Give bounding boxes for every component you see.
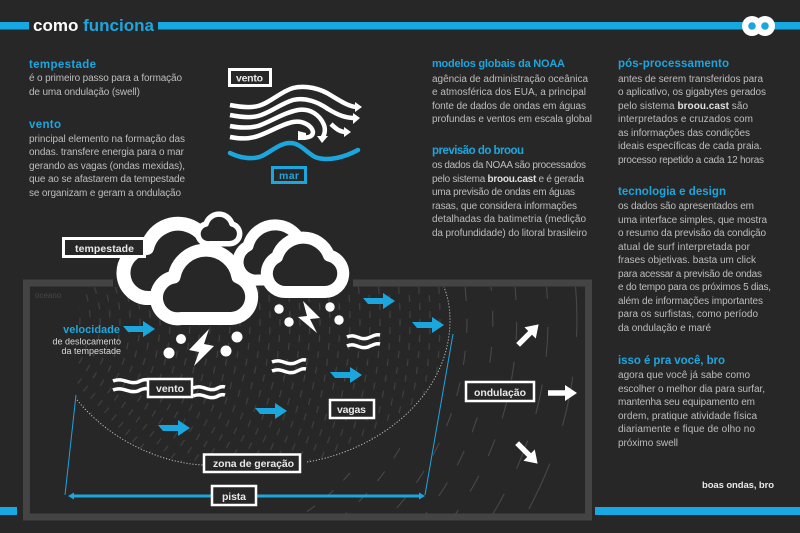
text: modelos globais and previsão do broou: fonte de dados de ondas em águas [432, 101, 586, 112]
text: pós-processamento, tecnologia e design, isso é pra você: além de informações importantes [618, 296, 763, 307]
text: pós-processamento, tecnologia e design, isso é pra você: atual de surf interpretada por [618, 242, 751, 253]
label: pista [212, 486, 256, 505]
label: vagas: vagas [337, 404, 366, 416]
label: tempestade [64, 238, 144, 256]
text: modelos globais and previsão do broou: uma previsão de ondas em águas [432, 187, 575, 198]
text: modelos globais and previsão do broou: previsão do broou [432, 145, 524, 157]
ocean label: oceano [35, 291, 62, 300]
white swell arrows [511, 319, 577, 469]
label: tempestade: tempestade [75, 243, 134, 255]
text: pós-processamento, tecnologia e design, isso é pra você: diariamente e fique de olho no [618, 424, 755, 435]
text: modelos globais and previsão do broou: detalhadas da batimetria (medição [432, 214, 586, 225]
text: tempestade and vento: que ao se afastarem da tempestade [29, 174, 185, 185]
wind wave symbols [113, 335, 380, 398]
text: tempestade and vento: principal elemento na formação das [29, 134, 185, 145]
storm clouds [123, 214, 343, 319]
label: zona de geração [204, 454, 300, 472]
text: pós-processamento, tecnologia e design, isso é pra você: antes de serem transferidos para [618, 74, 763, 85]
text: pós-processamento, tecnologia e design, isso é pra você [618, 58, 771, 449]
cloud: main front [156, 250, 252, 319]
label: velocidade de deslocamento da tempestade: velocidade [63, 324, 120, 336]
sign-off text: boas ondas, bro [702, 480, 774, 491]
text: pós-processamento, tecnologia e design, isso é pra você: isso é pra você, bro [618, 355, 725, 367]
text: modelos globais and previsão do broou [432, 58, 592, 239]
label: velocidade de deslocamento da tempestade: de deslocamento [52, 336, 121, 346]
footer bars [0, 507, 800, 515]
text: tempestade and vento: gerando as vagas (ondas mexidas), [29, 161, 185, 172]
pista arrow [68, 492, 425, 500]
text: pós-processamento, tecnologia e design, isso é pra você: o aplicativo, os gigabytes gerados [618, 87, 766, 98]
text: modelos globais and previsão do broou: e atmosférica dos EUA, a principal [432, 87, 586, 98]
text: pós-processamento, tecnologia e design, isso é pra você: agora que você já sabe como [618, 370, 750, 381]
text: modelos globais and previsão do broou: agência de administração oceânica [432, 74, 588, 85]
text: modelos globais and previsão do broou: pelo sistema broou.cast e é gerada [432, 174, 584, 185]
text: pós-processamento, tecnologia e design, isso é pra você: ideais específicas de cada praia. [618, 141, 762, 152]
text: pós-processamento, tecnologia e design, isso é pra você: uma interface simples, que mostra [618, 215, 767, 226]
text: tempestade and vento: ondas. transfere energia para o mar [29, 147, 185, 158]
text: modelos globais and previsão do broou: profundas e ventos em escala global [432, 114, 592, 125]
label: ondulação: ondulação [474, 387, 526, 399]
text: pós-processamento, tecnologia e design, isso é pra você: para acessar a previsão de ondas [618, 269, 762, 280]
text: pós-processamento, tecnologia e design, isso é pra você: os dados são apresentados em [618, 201, 754, 212]
label: vagas [330, 400, 374, 418]
cloud: front right [267, 238, 343, 292]
text: pós-processamento, tecnologia e design, isso é pra você: da ondulação e maré [618, 323, 711, 334]
label: vento: vento [236, 72, 263, 84]
text: pós-processamento, tecnologia e design, isso é pra você: o resumo da previsão da condição [618, 228, 766, 239]
wind lines [230, 87, 357, 138]
blue wind arrows [123, 293, 444, 436]
text: pós-processamento, tecnologia e design, isso é pra você: interpretados e cruzados com [618, 114, 753, 125]
header bar and title [0, 16, 800, 35]
text: modelos globais and previsão do broou: rasas, que considera informações [432, 201, 577, 212]
text: tempestade and vento [29, 59, 185, 199]
storm precipitation and lightning [164, 301, 344, 366]
diagram: wind and sea [230, 70, 362, 182]
text: pós-processamento, tecnologia e design, isso é pra você: pós-processamento [618, 58, 729, 70]
text: modelos globais and previsão do broou: os dados da NOAA são processados [432, 160, 586, 171]
text: pós-processamento, tecnologia e design, isso é pra você: para os surfistas, como período [618, 309, 758, 320]
label: zona de geração: zona de geração [213, 458, 294, 470]
panel: ocean frame [26, 283, 588, 517]
wind arrowheads [298, 102, 362, 143]
label: ondulação [466, 382, 534, 401]
text: tempestade and vento: se organizam e geram a ondulação [29, 188, 181, 199]
text: modelos globais and previsão do broou: da profundidade) do litoral brasileiro [432, 228, 587, 239]
cloud: back left [123, 224, 210, 298]
label: velocidade de deslocamento da tempestade [52, 324, 121, 356]
label: velocidade de deslocamento da tempestade: da tempestade [61, 346, 121, 356]
text: tempestade and vento: tempestade [29, 59, 96, 71]
label: vento [148, 379, 192, 397]
text: modelos globais and previsão do broou: modelos globais da NOAA [432, 58, 565, 70]
sea wave [230, 143, 358, 159]
text: pós-processamento, tecnologia e design, isso é pra você: mantenha seu equipamento em [618, 397, 755, 408]
text: tempestade and vento: é o primeiro passo para a formação [29, 73, 182, 84]
text: pós-processamento, tecnologia e design, isso é pra você: tecnologia e design [618, 186, 726, 198]
icon: logo [742, 16, 775, 36]
label: vento: vento [156, 383, 184, 395]
label: pista: pista [222, 491, 246, 503]
text: pós-processamento, tecnologia e design, isso é pra você: as informações das condições [618, 128, 750, 139]
generation zone dotted boundary [77, 287, 450, 465]
text: tempestade and vento: de uma ondulação (swell) [29, 87, 140, 98]
generation zone wave hatching [77, 287, 450, 462]
text: pós-processamento, tecnologia e design, isso é pra você: frases objetivas. basta um click [618, 255, 757, 266]
fetch guide lines [65, 334, 453, 495]
cloud: back right [238, 225, 303, 280]
title: como funciona [33, 16, 155, 35]
text: pós-processamento, tecnologia e design, isso é pra você: processo repetido a cada 12 horas [618, 155, 764, 166]
text: pós-processamento, tecnologia e design, isso é pra você: escolher o melhor dia para surfar, [618, 384, 765, 395]
swell wave fronts [304, 287, 577, 514]
text: pós-processamento, tecnologia e design, isso é pra você: pelo sistema broou.cast são [618, 101, 748, 112]
text: pós-processamento, tecnologia e design, isso é pra você: próximo swell [618, 438, 678, 449]
text: pós-processamento, tecnologia e design, isso é pra você: e do tempo para os próximos 5 dias, [618, 282, 771, 293]
cloud: small top [198, 214, 240, 244]
text: tempestade and vento: vento [29, 119, 61, 131]
text: pós-processamento, tecnologia e design, isso é pra você: ordem, pratique atividade física [618, 411, 757, 422]
label: mar: mar [279, 170, 299, 182]
